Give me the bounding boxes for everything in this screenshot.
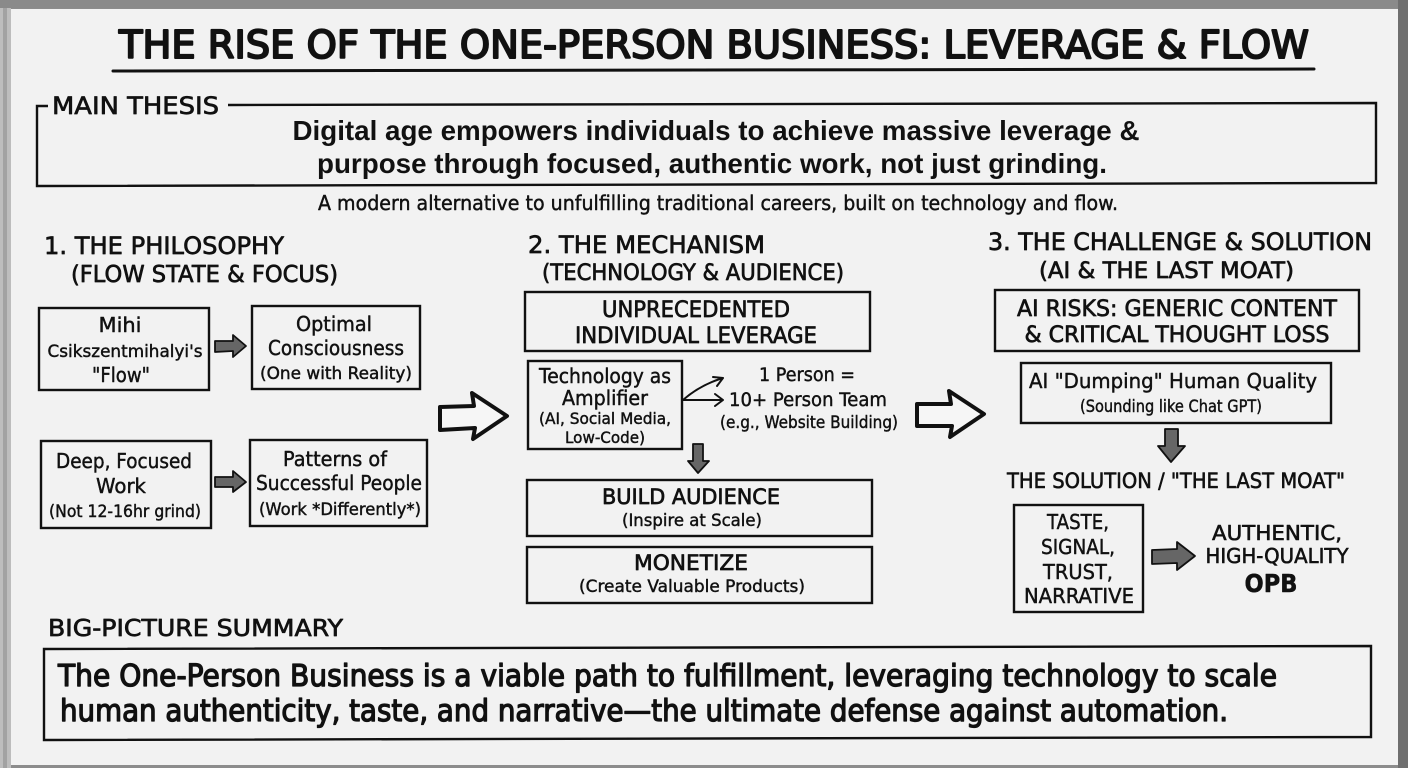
box: optimal consciousness: Consciousness (268, 336, 404, 360)
box: technology as amplifier (528, 361, 682, 449)
heading: philosophy: (FLOW STATE & FOCUS) (71, 262, 338, 288)
box: ai risks: & CRITICAL THOUGHT LOSS (1024, 323, 1330, 348)
box: monetize: MONETIZE (634, 551, 748, 575)
team equation: (e.g., Website Building) (720, 413, 898, 433)
team equation: 1 Person = (759, 364, 855, 386)
box: build audience (527, 480, 872, 536)
team equation: 10+ Person Team (729, 389, 887, 411)
box: flow (39, 308, 209, 390)
heading: challenge (988, 228, 1372, 284)
subtitle: A modern alternative to unfulfilling traditional careers, built on technology and flow. (318, 191, 1118, 215)
thesis statement (292, 115, 1140, 179)
box: optimal consciousness: Optimal (296, 312, 372, 336)
panel: summary: human authenticity, taste, and narrative—the ultimate defense against automation. (60, 694, 1228, 729)
box: ai dumping (1021, 363, 1331, 423)
box: build audience: (Inspire at Scale) (622, 511, 762, 531)
box: ai dumping: (Sounding like Chat GPT) (1080, 397, 1262, 417)
box: build audience: BUILD AUDIENCE (602, 485, 780, 509)
box: optimal consciousness: (One with Reality) (260, 364, 412, 384)
box: monetize: (Create Valuable Products) (579, 577, 805, 597)
arrow (1152, 542, 1195, 570)
panel: summary: The One-Person Business is a viable path to fulfillment, leveraging technology to scale (57, 659, 1277, 694)
title: THE RISE OF THE ONE-PERSON BUSINESS: LEVERAGE & FLOW (118, 23, 1309, 67)
box: flow: Csikszentmihalyi's (48, 342, 203, 362)
arrow: philosophy to mechanism (440, 393, 507, 439)
column 2: the mechanism (525, 231, 898, 603)
box: taste signal trust narrative: SIGNAL, (1041, 535, 1115, 559)
result: authentic opb: AUTHENTIC, (1212, 521, 1342, 545)
panel: summary (44, 646, 1371, 740)
box: deep work: Deep, Focused (56, 449, 192, 473)
box: deep work (41, 441, 211, 528)
arrow (215, 471, 246, 492)
heading: main thesis: MAIN THESIS (52, 92, 219, 120)
box: flow: Mihi (98, 313, 142, 337)
panel: main thesis (37, 92, 1376, 186)
box: technology as amplifier: Amplifier (562, 386, 649, 410)
column 3: challenge and solution (988, 228, 1372, 612)
box: optimal consciousness (252, 306, 420, 389)
heading: mechanism: 2. THE MECHANISM (528, 231, 765, 259)
arrow down (1158, 429, 1185, 462)
result: authentic opb: HIGH-QUALITY (1206, 544, 1349, 568)
result: authentic opb: OPB (1244, 569, 1298, 598)
box: patterns (250, 440, 427, 526)
box: ai dumping: AI "Dumping" Human Quality (1029, 369, 1317, 393)
heading: philosophy: 1. THE PHILOSOPHY (44, 232, 284, 260)
box: technology as amplifier: (AI, Social Media, (539, 409, 671, 428)
box: taste signal trust narrative: TRUST, (1042, 560, 1113, 584)
forked arrows (683, 377, 723, 406)
column 1: the philosophy (39, 232, 427, 528)
thesis statement: Digital age empowers individuals to achieve massive leverage & (292, 115, 1140, 146)
box: technology as amplifier: Technology as (538, 364, 671, 388)
box: monetize (527, 547, 872, 603)
box: taste signal trust narrative: NARRATIVE (1024, 584, 1134, 608)
box: technology as amplifier: Low-Code) (565, 428, 645, 447)
heading: mechanism (528, 231, 844, 286)
arrow (215, 335, 246, 357)
box: individual leverage: INDIVIDUAL LEVERAGE (575, 324, 817, 349)
heading: big-picture summary: BIG-PICTURE SUMMARY (48, 616, 344, 642)
box: individual leverage: UNPRECEDENTED (602, 298, 790, 323)
box: patterns: (Work *Differently*) (259, 500, 421, 520)
heading: challenge: (AI & THE LAST MOAT) (1039, 259, 1294, 284)
heading: the solution: THE SOLUTION / "THE LAST MOAT" (1006, 469, 1345, 493)
heading: mechanism: (TECHNOLOGY & AUDIENCE) (542, 261, 844, 286)
box: ai risks (995, 290, 1359, 351)
box: patterns: Patterns of (283, 447, 388, 471)
box: individual leverage (525, 292, 870, 351)
box: flow: "Flow" (92, 363, 150, 387)
heading: challenge: 3. THE CHALLENGE & SOLUTION (988, 228, 1372, 256)
arrow: mechanism to challenge (917, 391, 984, 437)
thesis statement: purpose through focused, authentic work, not just grinding. (317, 148, 1107, 179)
team equation (720, 364, 898, 433)
box: ai risks: AI RISKS: GENERIC CONTENT (1017, 297, 1338, 322)
box: deep work: (Not 12-16hr grind) (49, 502, 201, 522)
arrow down (688, 444, 709, 473)
box: patterns: Successful People (256, 471, 422, 495)
result: authentic opb (1206, 521, 1349, 598)
box: deep work: Work (96, 474, 146, 498)
box: taste signal trust narrative (1014, 505, 1143, 612)
heading: philosophy (44, 232, 338, 288)
box: taste signal trust narrative: TASTE, (1046, 510, 1109, 534)
